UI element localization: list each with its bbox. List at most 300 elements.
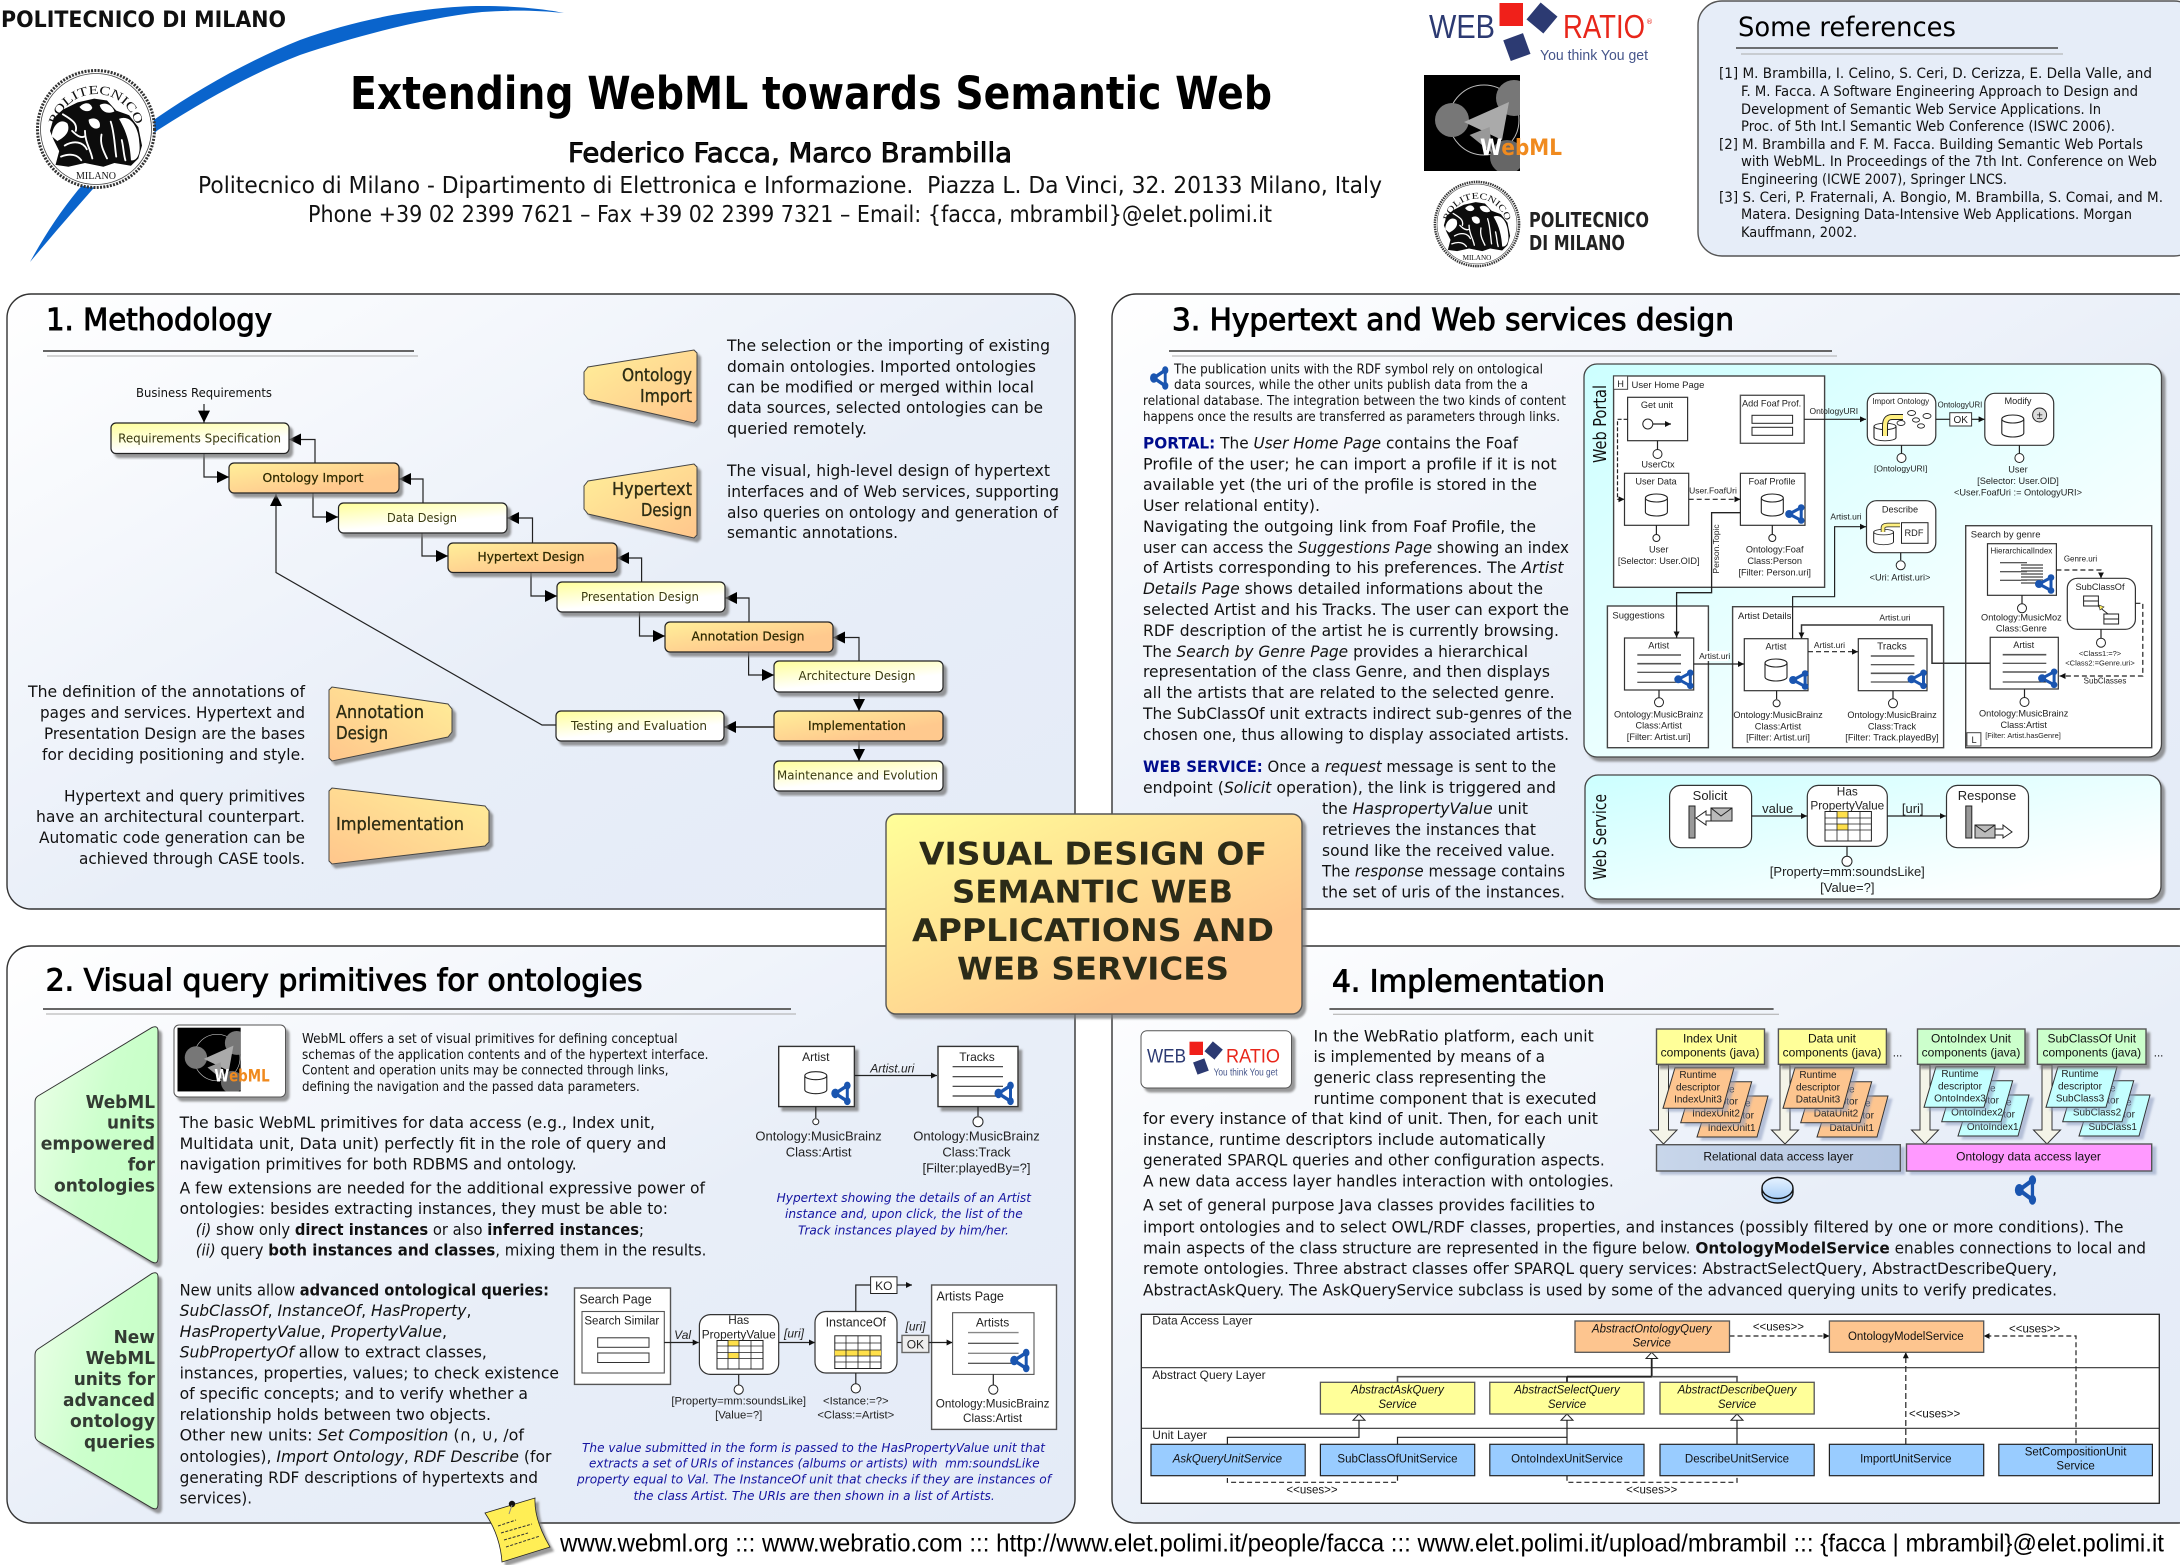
page: User Home Page: User Data — [1635, 476, 1678, 486]
panel: some references: Engineering (ICWE 2007), Springer LNCS. — [1741, 172, 2007, 188]
logo: Politecnico seal and name: POLITECNICO — [1442, 192, 1510, 220]
unit: HasPropertyValue: PropertyValue — [1810, 798, 1885, 812]
operation unit: Import Ontology: Import Ontology — [1872, 397, 1929, 406]
callout: Annotation Design: Design — [336, 723, 388, 744]
text: portal description: Navigating the outgoing link from Foaf Profile, the — [1143, 517, 1536, 536]
panel: some references: Proc. of 5th Int.l Semantic Web Conference (ISWC 2006). — [1741, 119, 2115, 135]
page: User Home Page: User.FoafUri — [1689, 486, 1737, 496]
text: basic primitives: (i) show only direct instances or also inferred instances; — [196, 1220, 644, 1239]
page: Suggestions: [Filter: Artist.uri] — [1627, 732, 1691, 742]
component: OntoIndex Unit: Runtime — [1974, 1097, 2012, 1108]
operation unit: Modify: Modify — [2004, 396, 2032, 406]
component: Index Unit: Runtime — [1679, 1070, 1717, 1081]
text: advanced ontological queries: HasPropertyValue, PropertyValue, — [180, 1322, 447, 1341]
page: User Home Page: UserCtx — [1641, 460, 1675, 470]
central banner: SEMANTIC WEB — [952, 875, 1233, 911]
chart: component architecture: ... — [2154, 1048, 2163, 1060]
class: AbstractDescribeQueryService: AbstractDescribeQuery — [1677, 1385, 1798, 1397]
page: Artist Details: [Filter: Artist.uri] — [1746, 732, 1810, 742]
text: advanced ontological queries: New units allow advanced ontological queries: — [180, 1280, 549, 1300]
links between pages: Artist.uri — [1699, 651, 1730, 661]
operation unit: Describe — [1866, 501, 1936, 583]
text: web service description — [1143, 757, 1565, 902]
component: Data unit: Runtime — [1799, 1070, 1837, 1081]
class: AbstractDescribeQueryService — [1660, 1382, 1814, 1414]
component: SubClassOf Unit: SubClass2 — [2073, 1108, 2122, 1119]
text: basic primitives: ontologies: besides extracting instances, they must be able to: — [180, 1199, 668, 1218]
class: OntoIndexUnitService — [1490, 1444, 1644, 1476]
diagram: Artist to Tracks hypertext: Artist — [802, 1050, 830, 1064]
chart: Web Portal hypertext diagram: Web Portal — [1590, 385, 1611, 463]
panel: some references: Matera. Designing Data-Intensive Web Applications. Morgan — [1741, 207, 2132, 223]
callout: Implementation: Implementation — [336, 814, 464, 835]
diagram: search flow: [Value=?] — [715, 1410, 762, 1422]
logo: Politecnico seal and name — [1434, 180, 1649, 268]
page: User Home Page: H — [1617, 379, 1624, 389]
page: Search by genre: L — [1971, 735, 1977, 745]
component: SubClassOf Unit: descriptor — [2091, 1110, 2136, 1120]
text: portal description: representation of the class Genre, and then displays — [1143, 662, 1550, 681]
text: implementation description: AbstractAskQuery. The AskQueryService subclass is used by some of the advanced querying units to verify predicates. — [1143, 1281, 2057, 1300]
logo: Politecnico seal and name: DI MILANO — [1529, 231, 1625, 255]
chart: Web Service diagram — [1585, 775, 2161, 899]
panel: some references — [1698, 1, 2180, 256]
page: Search by genre: Class:Artist — [2000, 720, 2047, 730]
caption: search flow: property equal to Val. The InstanceOf unit that checks if they are instances of — [576, 1472, 1053, 1487]
title: Extending WebML towards Semantic Web — [350, 67, 1272, 120]
text: implementation description: Automatic code generation can be — [39, 828, 305, 847]
chart: waterfall process: Implementation — [808, 718, 906, 733]
operation unit: Describe: <Uri: Artist.uri> — [1870, 573, 1930, 583]
text: advanced ontological queries: SubPropertyOf allow to extract classes, — [180, 1343, 487, 1362]
text: advanced ontological queries — [180, 1280, 559, 1508]
page: User Home Page: User Home Page — [1632, 380, 1704, 391]
chart: UML class diagram: Abstract Query Layer — [1152, 1368, 1266, 1382]
logo: WebRatio — [1429, 3, 1653, 64]
component: SubClassOf Unit: Runtime — [2094, 1097, 2132, 1108]
chart: Web Service diagram: [uri] — [1902, 801, 1924, 816]
component: Data unit: components (java) — [1783, 1046, 1881, 1060]
diagram: search flow: <Class:=Artist> — [817, 1410, 895, 1422]
component: SubClassOf Unit: SubClass1 — [2089, 1122, 2137, 1133]
page: Artist Details — [1733, 607, 1944, 748]
text: portal description: The Search by Genre Page provides a hierarchical — [1142, 642, 1528, 661]
text: implementation description: A new data access layer handles interaction with ontologies. — [1143, 1172, 1614, 1191]
link: OK to Modify: OntologyURI — [1938, 400, 1982, 409]
diagram: search flow: InstanceOf — [826, 1316, 887, 1330]
unit: Response — [1946, 785, 2028, 848]
text: advanced ontological queries: instances, properties, values; to check existence — [180, 1363, 559, 1382]
text: implementation description: In the WebRatio platform, each unit — [1314, 1027, 1594, 1046]
text: implementation description: main aspects of the class structure are represented in the figure below. OntologyModelService enables connections to local and — [1143, 1238, 2146, 1257]
callout: New WebML units for advanced ontology queries: ontology — [70, 1411, 155, 1432]
text: ontology import description: data sources, selected ontologies can be — [727, 398, 1043, 417]
callout: New WebML units for advanced ontology queries: WebML — [86, 1348, 155, 1369]
unit: Solicit — [1670, 785, 1752, 848]
diagram: search flow: OK — [907, 1338, 924, 1352]
page: User Home Page: Add Foaf Prof. — [1742, 399, 1801, 409]
text: implementation description: instance, runtime descriptors include automatically — [1143, 1130, 1546, 1149]
link: OK to Modify: OK — [1953, 415, 1968, 426]
text: web service description: WEB SERVICE: Once a request message is sent to the — [1143, 757, 1556, 776]
text: WebML intro: defining the navigation and the passed data parameters. — [302, 1080, 640, 1095]
class: ImportUnitService: ImportUnitService — [1860, 1454, 1951, 1466]
diagram: search flow: [Property=mm:soundsLike] — [671, 1395, 806, 1407]
component: Data unit: Runtime — [1817, 1084, 1855, 1095]
callout: Hypertext Design — [584, 464, 697, 538]
text: RDF symbol note — [1143, 362, 1566, 425]
text: ontology import description: The selection or the importing of existing — [726, 336, 1050, 355]
text: annotation design description: pages and services. Hypertext and — [40, 703, 305, 722]
page: User Home Page: Foaf Profile — [1749, 476, 1795, 486]
class: AbstractAskQueryService — [1320, 1382, 1475, 1414]
chart: waterfall process: Data Design — [387, 510, 457, 525]
icon: RDF symbol — [1150, 366, 1168, 390]
component: OntoIndex Unit: descriptor — [1955, 1096, 2000, 1106]
class: OntologyModelService — [1829, 1321, 1984, 1352]
component: SubClassOf Unit: descriptor — [2075, 1096, 2120, 1106]
component: Index Unit: IndexUnit2 — [1692, 1109, 1740, 1120]
logo card: WebML: WebML — [214, 1066, 270, 1087]
layer: Relational data access layer: Relational data access layer — [1703, 1150, 1853, 1164]
contact line: Phone +39 02 2399 7621 – Fax +39 02 2399 7321 – Email: {facca, mbrambil}@elet.polimi.it — [308, 202, 1272, 228]
logo: WebRatio: RATIO — [1563, 8, 1645, 45]
component: SubClassOf Unit: SubClassOf Unit — [2047, 1032, 2137, 1046]
component: OntoIndex Unit: components (java) — [1922, 1046, 2020, 1060]
callout: New WebML units for advanced ontology queries: New — [114, 1327, 155, 1348]
class: AbstractSelectQueryService — [1490, 1382, 1644, 1414]
panel: some references: [1] M. Brambilla, I. Celino, S. Ceri, D. Cerizza, E. Della Valle, and — [1719, 66, 2152, 82]
text: hypertext design description — [726, 461, 1059, 542]
chart: Web Service diagram: value — [1762, 801, 1793, 816]
diagram: search flow: [uri] — [783, 1326, 805, 1340]
text: annotation design description: for deciding positioning and style. — [42, 745, 305, 764]
logo: WebRatio: WEB — [1429, 8, 1495, 45]
callout: WebML units empowered for ontologies — [35, 1027, 158, 1263]
page: User Home Page: Get unit — [1641, 400, 1674, 410]
text: portal description: RDF description of the artist he is currently browsing. — [1143, 621, 1559, 640]
chart: UML class diagram: Unit Layer — [1152, 1428, 1207, 1442]
diagram: search flow: Val — [674, 1328, 691, 1342]
sticky note — [485, 1498, 550, 1562]
diagram: search flow: [uri] — [904, 1320, 926, 1334]
class: SetCompositionUnitService — [1999, 1444, 2152, 1476]
chart: UML class diagram: <<uses>> — [2009, 1323, 2060, 1335]
text: basic primitives: navigation primitives for both RDBMS and ontology. — [180, 1155, 577, 1174]
text: implementation description: runtime component that is executed — [1314, 1089, 1597, 1108]
component: Index Unit: Runtime — [1697, 1084, 1735, 1095]
text: portal description: User relational entity). — [1143, 496, 1320, 515]
page: User Home Page: User — [1649, 545, 1668, 555]
component: SubClassOf Unit: components (java) — [2042, 1046, 2141, 1060]
chart: waterfall process: Testing and Evaluation — [570, 718, 707, 733]
logo card: WebRatio: RATIO — [1226, 1046, 1280, 1067]
component: Index Unit: descriptor — [1676, 1083, 1721, 1094]
page: Search by genre: Artist — [2013, 640, 2035, 650]
page: Search by genre: Genre.uri — [2064, 555, 2097, 564]
text: portal description: PORTAL: The User Home Page contains the Foaf — [1143, 434, 1518, 453]
links between pages: Artist.uri — [1830, 511, 1862, 521]
text: implementation description — [1143, 1027, 2146, 1300]
chart: Web Service diagram: Web Service — [1590, 794, 1611, 880]
link: OK to Modify — [1936, 400, 1985, 426]
text: hypertext design description: The visual, high-level design of hypertext — [726, 461, 1050, 480]
caption: search flow: The value submitted in the form is passed to the HasPropertyValue unit that — [582, 1440, 1046, 1455]
text: RDF symbol note: data sources, while the other units publish data from the a — [1174, 377, 1528, 393]
diagram: Artist to Tracks hypertext: Artist.uri — [869, 1062, 915, 1076]
link: Add Foaf to Import Ontology — [1804, 406, 1866, 419]
central banner: VISUAL DESIGN OF — [919, 836, 1267, 872]
text: implementation description: is implemented by means of a — [1314, 1047, 1545, 1066]
link: Add Foaf to Import Ontology: OntologyURI — [1809, 406, 1858, 416]
diagram: Artist to Tracks hypertext: Class:Artist — [786, 1144, 852, 1159]
diagram: search flow: KO — [875, 1279, 892, 1293]
component: Data unit: descriptor — [1796, 1083, 1841, 1094]
component: Data unit: DataUnit3 — [1796, 1095, 1841, 1106]
diagram: Artist to Tracks hypertext: [Filter:playedBy=?] — [922, 1160, 1031, 1175]
text: web service description: the HaspropertyValue unit — [1322, 799, 1528, 818]
text: portal description: Profile of the user; he can import a profile if it is not — [1143, 455, 1557, 474]
text: advanced ontological queries: of specific concepts; and to verify whether a — [180, 1384, 528, 1403]
text: annotation design description: The definition of the annotations of — [27, 682, 305, 701]
class: SetCompositionUnitService: Service — [2056, 1461, 2095, 1473]
text: RDF symbol note: happens once the results are transferred as parameters through links. — [1143, 409, 1560, 425]
page: Artist Details: Tracks — [1877, 641, 1907, 652]
diagram: search flow: Search Similar — [584, 1316, 659, 1328]
logo card: WebRatio: WEB — [1147, 1046, 1186, 1067]
authors: Federico Facca, Marco Brambilla — [568, 138, 1012, 169]
page: Search by genre: Class:Genre — [1996, 624, 2047, 634]
panel: 4. Implementation — [1112, 946, 2180, 1523]
callout: Implementation — [329, 788, 489, 864]
page: User Home Page: Class:Person — [1747, 556, 1802, 566]
operation unit: Import Ontology — [1867, 393, 1936, 474]
caption: search flow — [576, 1440, 1053, 1503]
component: SubClassOf Unit: descriptor — [2058, 1082, 2103, 1093]
page: Suggestions: Suggestions — [1612, 610, 1665, 621]
callout: WebML units empowered for ontologies: WebML — [86, 1092, 155, 1113]
page: Suggestions: Artist — [1648, 641, 1670, 651]
component: Data unit: descriptor — [1814, 1096, 1859, 1108]
icon: database — [1762, 1178, 1793, 1203]
diagram: search flow: Ontology:MusicBrainz — [936, 1398, 1050, 1410]
diagram: search flow: Artists — [976, 1316, 1009, 1330]
diagram: search flow: <Istance:=?> — [823, 1395, 889, 1407]
footer links: www.webml.org ::: www.webratio.com ::: http://www.elet.polimi.it/people/facca ::: www.elet.polimi.it/upload/mbrambil ::: {facca | mbrambil}@elet.polimi.it — [559, 1530, 2164, 1558]
class: DescribeUnitService: DescribeUnitService — [1685, 1454, 1789, 1466]
text: WebML intro: schemas of the application contents and of the hypertext interface. — [302, 1048, 708, 1063]
component: OntoIndex Unit: OntoIndex3 — [1934, 1094, 1986, 1105]
logo: WebML: WebML — [1480, 136, 1562, 161]
layer: Ontology data access layer: Ontology data access layer — [1956, 1150, 2101, 1164]
chart: Web Portal hypertext diagram — [1584, 364, 2162, 757]
text: implementation description: A set of general purpose Java classes provides facilities to — [1143, 1196, 1595, 1215]
text: implementation description: have an architectural counterpart. — [36, 807, 305, 826]
class: DescribeUnitService — [1660, 1444, 1814, 1476]
callout: New WebML units for advanced ontology queries: queries — [84, 1432, 155, 1453]
panel: some references: [2] M. Brambilla and F. M. Facca. Building Semantic Web Portals — [1719, 137, 2143, 153]
chart: UML class diagram: <<uses>> — [1909, 1408, 1960, 1420]
page: Suggestions: Class:Artist — [1635, 721, 1682, 731]
icon: Politecnico seal — [36, 69, 156, 189]
chart: component architecture — [1650, 1029, 2163, 1205]
logo: Politecnico seal and name: MILANO — [1463, 254, 1491, 262]
page: User Home Page: Person.Topic — [1711, 524, 1721, 574]
text: web service description: endpoint (Solicit operation), the link is triggered and — [1143, 778, 1556, 797]
caption: hypertext details: Track instances played by him/her. — [798, 1222, 1009, 1238]
callout: Hypertext Design: Hypertext — [612, 479, 692, 500]
callout: WebML units empowered for ontologies: for — [128, 1154, 155, 1175]
class: AbstractDescribeQueryService: Service — [1718, 1399, 1756, 1411]
panel: 1. Methodology — [7, 294, 1075, 909]
component: Data unit: Runtime — [1833, 1098, 1871, 1109]
icon: RDF ontology — [2015, 1175, 2036, 1205]
class: AbstractSelectQueryService: Service — [1548, 1399, 1586, 1411]
chart: waterfall process: Ontology Import — [262, 470, 364, 485]
chart: waterfall process — [111, 385, 943, 791]
text: advanced ontological queries: services). — [180, 1489, 252, 1508]
component: Index Unit — [1650, 1029, 1768, 1144]
class: AbstractAskQueryService: Service — [1378, 1399, 1417, 1411]
chart: waterfall process: Maintenance and Evolution — [777, 767, 938, 782]
panel: 3. Hypertext and Web services design: 3. Hypertext and Web services design — [1172, 303, 1734, 338]
page: Search by genre — [1966, 526, 2152, 748]
text: implementation description: remote ontologies. Three abstract classes offer SPARQL query services: AbstractSelectQuery, AbstractDescribeQuery, — [1143, 1259, 2057, 1278]
component: OntoIndex Unit — [1912, 1029, 2029, 1144]
component: SubClassOf Unit: Runtime — [2061, 1069, 2099, 1080]
page: Artist Details: Artist.uri — [1879, 613, 1911, 623]
component: OntoIndex Unit: descriptor — [1938, 1082, 1983, 1093]
text: implementation description: achieved through CASE tools. — [79, 849, 305, 868]
blue swoosh — [30, 6, 564, 262]
callout: Annotation Design: Annotation — [336, 702, 424, 723]
logo: WebRatio: ® — [1646, 18, 1653, 26]
central banner: APPLICATIONS AND — [912, 913, 1274, 949]
text: hypertext design description: interfaces and of Web services, supporting — [727, 482, 1059, 501]
page: Search by genre: Search by genre — [1971, 529, 2041, 540]
component: Index Unit: IndexUnit1 — [1708, 1123, 1756, 1134]
page: Search by genre: <Class1:=?> — [2079, 649, 2122, 658]
text: implementation description: generated SPARQL queries and other configuration aspects. — [1143, 1151, 1605, 1170]
diagram: search flow: PropertyValue — [702, 1328, 776, 1342]
callout: WebML units empowered for ontologies: units — [107, 1112, 155, 1134]
unit: HasPropertyValue: Has — [1837, 784, 1858, 798]
chart: UML class diagram: <<uses>> — [1626, 1484, 1678, 1496]
text: portal description: user can access the Suggestions Page showing an index — [1143, 538, 1569, 557]
operation unit: Modify: [Selector: User.OID] — [1977, 476, 2059, 486]
callout: New WebML units for advanced ontology queries: units for — [74, 1369, 155, 1390]
class: OntoIndexUnitService: OntoIndexUnitService — [1511, 1454, 1623, 1466]
page: Artist Details: [Filter: Track.playedBy] — [1845, 732, 1939, 742]
component: Index Unit: IndexUnit3 — [1674, 1095, 1722, 1106]
text: WebML intro: WebML offers a set of visual primitives for defining conceptual — [302, 1032, 678, 1047]
diagram: Artist to Tracks hypertext: Ontology:MusicBrainz — [755, 1128, 882, 1144]
chart: waterfall process: Architecture Design — [798, 668, 916, 683]
class: AbstractOntologyQueryService: AbstractOntologyQuery — [1591, 1323, 1713, 1335]
callout: Ontology Import: Ontology — [622, 365, 692, 386]
unit: HasPropertyValue: [Property=mm:soundsLike] — [1770, 864, 1925, 879]
text: portal description — [1142, 434, 1572, 744]
component: Data unit: DataUnit2 — [1814, 1109, 1859, 1120]
text: portal description: all the artists that are related to the selected genre. — [1143, 683, 1555, 702]
component: SubClassOf Unit: SubClass3 — [2056, 1094, 2105, 1105]
page: Suggestions — [1607, 606, 1708, 748]
diagram: search flow: Has — [728, 1313, 749, 1327]
diagram: search flow — [574, 1277, 1056, 1429]
text: advanced ontological queries: relationship holds between two objects. — [180, 1405, 491, 1424]
panel: some references: F. M. Facca. A Software Engineering Approach to Design and — [1741, 84, 2138, 100]
chart: UML class diagram: <<uses>> — [1753, 1322, 1804, 1334]
header: Politecnico di Milano wordmark: POLITECNICO DI MILANO — [1, 8, 286, 33]
diagram: Artist to Tracks hypertext: Class:Track — [942, 1144, 1011, 1159]
panel: 2. Visual query primitives for ontologies: 2. Visual query primitives for ontologies — [46, 964, 643, 999]
page: Search by genre: Ontology:MusicMoz — [1981, 613, 2062, 623]
class: AbstractOntologyQueryService — [1575, 1321, 1730, 1352]
callout: Ontology Import — [584, 350, 697, 423]
layer: Ontology data access layer — [1906, 1144, 2152, 1171]
component: Index Unit: Runtime — [1713, 1098, 1751, 1109]
page: Search by genre: SubClasses — [2084, 676, 2126, 685]
links between pages — [1677, 511, 1990, 664]
chart: waterfall process: Hypertext Design — [478, 549, 584, 564]
text: advanced ontological queries: generating RDF descriptions of hypertexts and — [180, 1468, 538, 1487]
chart: UML class diagram: <<uses>> — [1286, 1484, 1338, 1496]
logo: WebRatio: You think You get — [1540, 47, 1649, 64]
text: ontology import description — [726, 336, 1050, 438]
component: Data unit: Data unit — [1808, 1032, 1857, 1046]
operation unit: Modify — [1954, 393, 2082, 497]
page: User Home Page: [Selector: User.OID] — [1618, 556, 1700, 566]
caption: hypertext details: Hypertext showing the details of an Artist — [777, 1190, 1032, 1205]
page: Search by genre: SubClassOf — [2075, 582, 2125, 592]
text: hypertext design description: semantic annotations. — [727, 523, 898, 542]
operation unit: Describe: Describe — [1882, 505, 1918, 515]
unit: HasPropertyValue — [1770, 784, 1925, 895]
text: web service description: the set of uris of the instances. — [1322, 882, 1565, 902]
component: Index Unit: descriptor — [1694, 1096, 1739, 1108]
component: OntoIndex Unit: Runtime — [1958, 1083, 1996, 1094]
component: OntoIndex Unit: OntoIndex Unit — [1931, 1032, 2012, 1046]
page: Artist Details: Artist.uri — [1814, 640, 1845, 650]
class: AbstractOntologyQueryService: Service — [1633, 1337, 1671, 1349]
page: Suggestions: Ontology:MusicBrainz — [1614, 709, 1704, 719]
text: portal description: of Artists corresponding to his preferences. The Artist — [1143, 558, 1564, 577]
page: Search by genre: <Class2:=Genre.uri> — [2065, 659, 2135, 668]
panel: some references: Kauffmann, 2002. — [1741, 225, 1857, 241]
text: web service description: The response message contains — [1321, 862, 1565, 881]
chart: UML class diagram: Data Access Layer — [1152, 1313, 1252, 1327]
chart: waterfall process: Presentation Design — [581, 589, 699, 604]
text: basic primitives: The basic WebML primitives for data access (e.g., Index unit, — [179, 1113, 655, 1132]
central banner: WEB SERVICES — [957, 952, 1229, 988]
text: advanced ontological queries: ontologies), Import Ontology, RDF Describe (for — [180, 1447, 552, 1466]
text: web service description: sound like the received value. — [1322, 841, 1555, 860]
callout: WebML units empowered for ontologies: ontologies — [54, 1176, 155, 1196]
class: AskQueryUnitService — [1151, 1444, 1305, 1476]
operation unit: Import Ontology: [OntologyURI] — [1874, 464, 1927, 474]
class: ImportUnitService — [1829, 1444, 1984, 1476]
text: ontology import description: queried remotely. — [727, 419, 867, 438]
caption: hypertext details: instance and, upon click, the list of the — [785, 1206, 1023, 1221]
chart: UML class diagram — [1141, 1313, 2159, 1503]
text: portal description: selected Artist and his Tracks. The user can export the — [1143, 600, 1569, 619]
page: Search by genre: Ontology:MusicBrainz — [1979, 709, 2069, 719]
page: Artist Details: Ontology:MusicBrainz — [1847, 710, 1937, 720]
text: hypertext design description: also queries on ontology and generation of — [727, 503, 1058, 522]
text: implementation description: generic class representing the — [1314, 1068, 1546, 1087]
text: basic primitives: A few extensions are needed for the additional expressive power of — [180, 1178, 705, 1198]
diagram: search flow: Search Page — [579, 1292, 652, 1306]
